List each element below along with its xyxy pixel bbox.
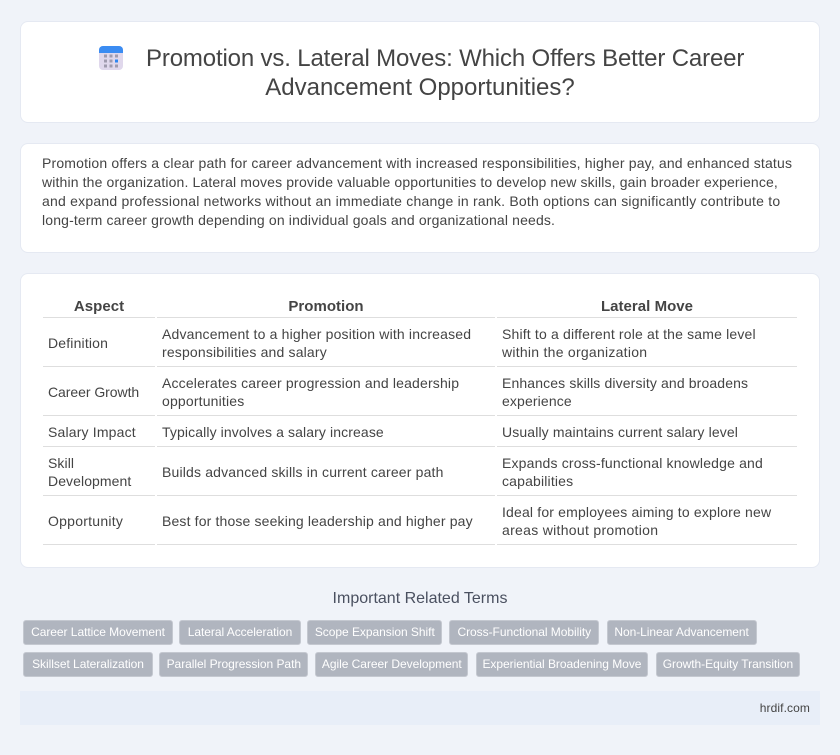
row: career growth [43, 375, 797, 416]
row: opportunity: Best for those seeking leadership and higher pay [162, 513, 473, 529]
tag: Parallel Progression Path [167, 657, 301, 671]
comparison table panel [20, 273, 820, 568]
row: skill development: capabilities [502, 473, 573, 489]
tag [23, 620, 173, 645]
title: Promotion vs. Lateral Moves: Which Offers Better Career [146, 45, 744, 72]
row: definition: within the organization [502, 344, 647, 360]
row: definition: Advancement to a higher position with increased [162, 326, 471, 342]
tag: Experiential Broadening Move [482, 657, 641, 671]
title [146, 45, 744, 101]
row: opportunity: areas without promotion [502, 522, 658, 538]
footer bar [20, 691, 820, 725]
intro paragraph: within the organization. Lateral moves provide valuable opportunities to develop new skills, gain broader experience, [42, 174, 778, 190]
row: salary impact: Salary Impact [48, 424, 136, 440]
tag: Cross-Functional Mobility [457, 625, 591, 639]
tag: Skillset Lateralization [32, 657, 144, 671]
tag [449, 620, 599, 645]
intro paragraph: Promotion offers a clear path for career advancement with increased responsibilities, higher pay, and enhanced status [42, 155, 792, 171]
tag [607, 620, 757, 645]
row: skill development: Expands cross-functional knowledge and [502, 455, 763, 471]
related terms tags [23, 620, 800, 677]
intro paragraph: and expand professional networks without an immediate change in rank. Both options can significantly contribute to [42, 193, 780, 209]
row: definition: Definition [48, 335, 108, 351]
icon: calendar [99, 46, 123, 70]
row: career growth: Accelerates career progression and leadership [162, 375, 459, 391]
row: career growth: experience [502, 393, 572, 409]
row: skill development [43, 455, 797, 496]
row: salary impact: Usually maintains current salary level [502, 424, 738, 440]
table header: Aspect [74, 298, 124, 315]
header card [20, 21, 820, 123]
tag: Growth-Equity Transition [663, 657, 793, 671]
row: career growth: Enhances skills diversity and broadens [502, 375, 748, 391]
intro text panel [20, 143, 820, 253]
related terms heading: Important Related Terms [333, 590, 507, 607]
row: skill development: Builds advanced skills in current career path [162, 464, 444, 480]
row: salary impact [43, 424, 797, 447]
title: Advancement Opportunities? [265, 74, 575, 101]
row: career growth: opportunities [162, 393, 244, 409]
row: definition: Shift to a different role at the same level [502, 326, 756, 342]
tag [159, 652, 308, 677]
row: opportunity [43, 504, 797, 545]
tag: Scope Expansion Shift [315, 625, 435, 639]
intro paragraph: long-term career growth depending on individual goals and organizational needs. [42, 212, 555, 228]
tag: Lateral Acceleration [188, 625, 292, 639]
tag [315, 652, 468, 677]
tag [476, 652, 648, 677]
row: salary impact: Typically involves a salary increase [162, 424, 384, 440]
tag [656, 652, 800, 677]
row: definition [43, 326, 797, 367]
tag [179, 620, 301, 645]
row: opportunity: Opportunity [48, 513, 123, 529]
row: career growth: Career Growth [48, 384, 139, 400]
row: skill development: Skill [48, 455, 74, 471]
table header [43, 298, 797, 318]
footer source: hrdif.com [760, 701, 810, 715]
row: opportunity: Ideal for employees aiming to explore new [502, 504, 771, 520]
tag: Non-Linear Advancement [614, 625, 749, 639]
table header: Promotion [288, 298, 364, 315]
tag [23, 652, 153, 677]
tag: Career Lattice Movement [31, 625, 165, 639]
table header: Lateral Move [601, 298, 693, 315]
tag: Agile Career Development [322, 657, 462, 671]
row: skill development: Development [48, 473, 131, 489]
row: definition: responsibilities and salary [162, 344, 327, 360]
intro paragraph [42, 155, 792, 228]
tag [307, 620, 442, 645]
